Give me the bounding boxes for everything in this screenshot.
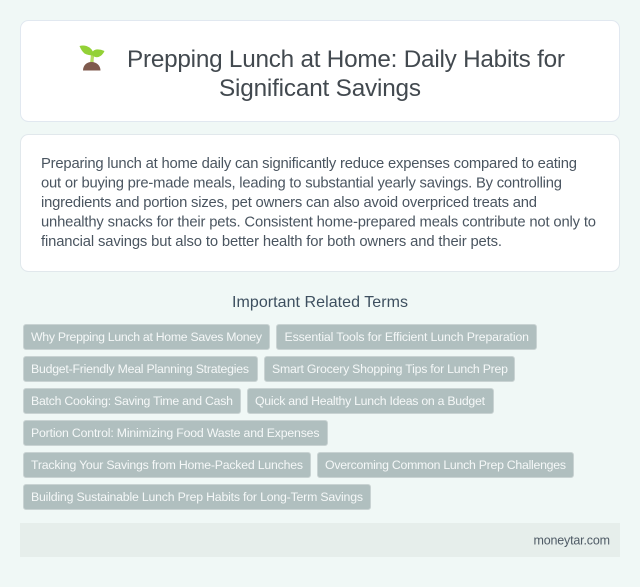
- tag 2: Essential Tools for Efficient Lunch Preparation: [284, 330, 529, 344]
- panel: summary text: Preparing lunch at home daily can significantly reduce expenses compared to eating: [41, 156, 577, 172]
- title: Significant Savings: [219, 75, 421, 102]
- icon: seedling: [80, 46, 104, 70]
- tag 1: Why Prepping Lunch at Home Saves Money: [31, 330, 263, 344]
- footer: moneytar.com: [534, 534, 610, 548]
- tag 7: [24, 420, 328, 446]
- panel: summary text: out or buying pre-made meals, leading to substantial yearly savings. By controlling: [41, 176, 562, 192]
- tag 10: Building Sustainable Lunch Prep Habits for Long-Term Savings: [31, 490, 363, 504]
- tag 10: [24, 484, 370, 510]
- tag 8: [24, 452, 310, 478]
- panel: title card: [20, 20, 620, 122]
- tag 9: [318, 452, 574, 478]
- footer: [20, 523, 620, 557]
- title: Prepping Lunch at Home: Daily Habits for: [127, 46, 565, 73]
- panel: summary text: [20, 134, 620, 272]
- tag 7: Portion Control: Minimizing Food Waste and Expenses: [31, 426, 320, 440]
- tag 5: [24, 388, 240, 414]
- tag 5: Batch Cooking: Saving Time and Cash: [31, 394, 233, 408]
- tags: related terms: [24, 324, 574, 510]
- tag 4: [264, 356, 514, 382]
- heading: related terms: Important Related Terms: [232, 294, 408, 311]
- tag 6: Quick and Healthy Lunch Ideas on a Budget: [255, 394, 486, 408]
- tag 2: [276, 324, 536, 350]
- tag 3: Budget-Friendly Meal Planning Strategies: [31, 362, 249, 376]
- title: [127, 46, 565, 102]
- panel: summary text: financial savings but also to better health for both owners and their pets.: [41, 234, 502, 250]
- tag 1: [24, 324, 270, 350]
- tag 9: Overcoming Common Lunch Prep Challenges: [325, 458, 566, 472]
- tag 4: Smart Grocery Shopping Tips for Lunch Prep: [272, 362, 508, 376]
- tag 6: [248, 388, 494, 414]
- tag 8: Tracking Your Savings from Home-Packed Lunches: [31, 458, 303, 472]
- panel: summary text: ingredients and portion sizes, pet owners can also avoid overpriced treats and: [41, 195, 537, 211]
- panel: summary text: unhealthy snacks for their pets. Consistent home-prepared meals contribute not only to: [41, 214, 596, 230]
- tag 3: [24, 356, 258, 382]
